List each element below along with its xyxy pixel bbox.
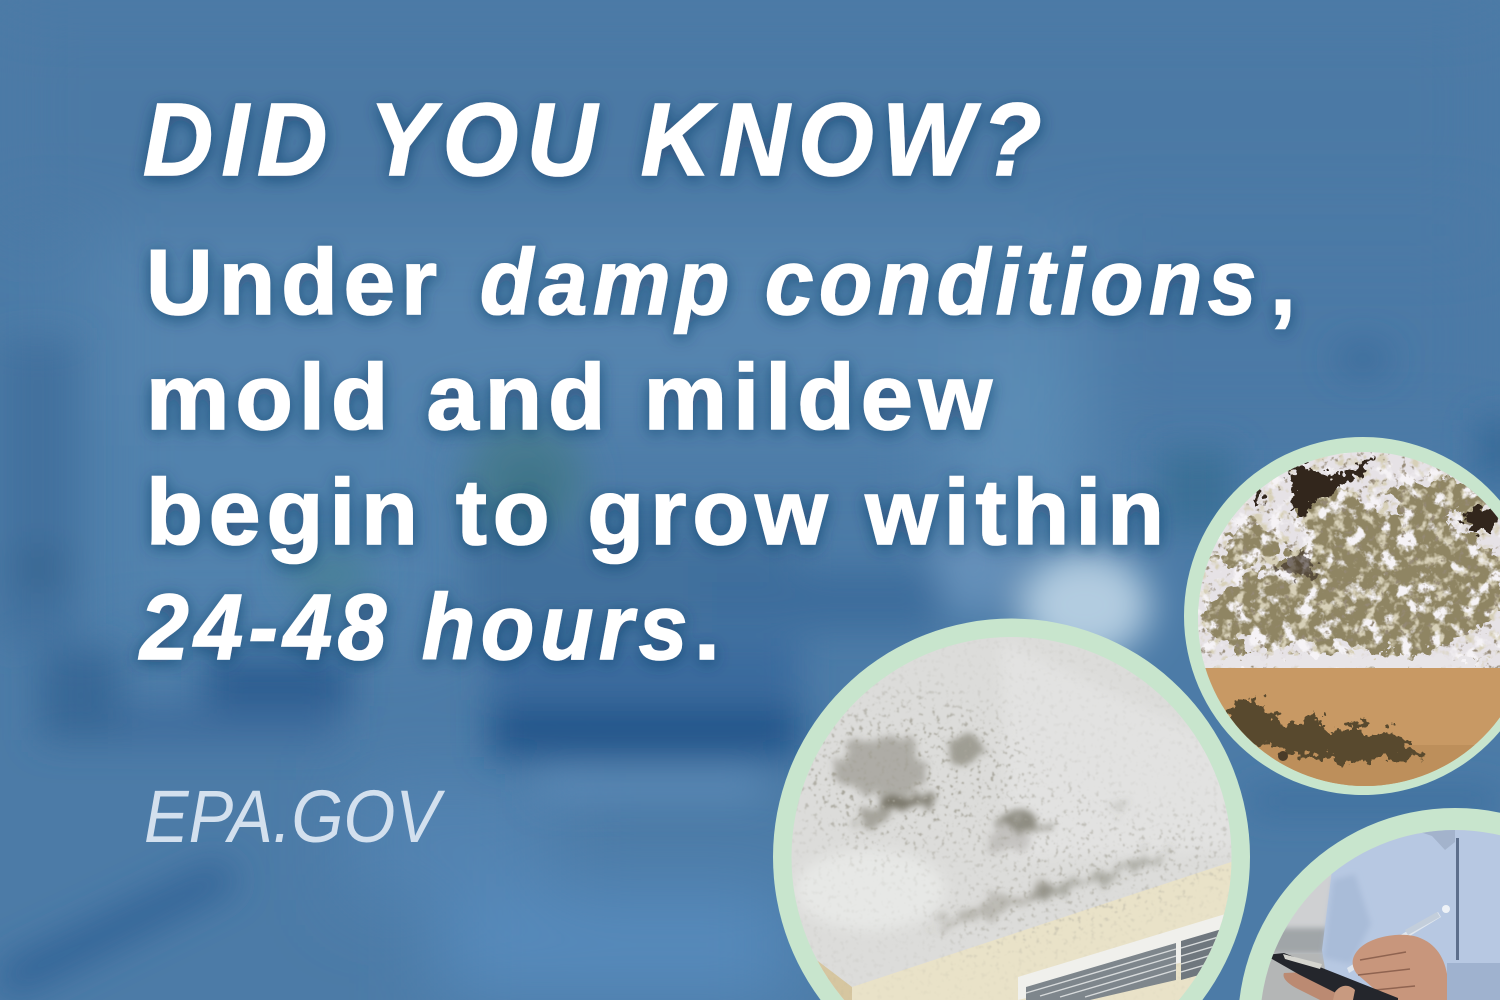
- photo circle: ceiling mold above air vent: [773, 619, 1250, 1000]
- photo circle: inspector with clipboard: [1239, 808, 1500, 1000]
- text block: main message: [138, 230, 1302, 679]
- source: EPA.GOV: EPA.GOV: [144, 775, 446, 858]
- text block: main message: Under: [146, 230, 443, 334]
- text block: main message: begin to grow within: [146, 460, 1170, 564]
- text block: main message: .: [694, 575, 726, 679]
- heading: did you know: DID YOU KNOW?: [143, 82, 1050, 197]
- text block: main message: mold and mildew: [146, 345, 998, 449]
- text block: main message: 24-48 hours: [138, 575, 693, 679]
- photo circle: moldy wall and wood: [1184, 437, 1500, 795]
- text block: main message: damp conditions: [480, 230, 1262, 334]
- text block: main message: ,: [1270, 230, 1302, 334]
